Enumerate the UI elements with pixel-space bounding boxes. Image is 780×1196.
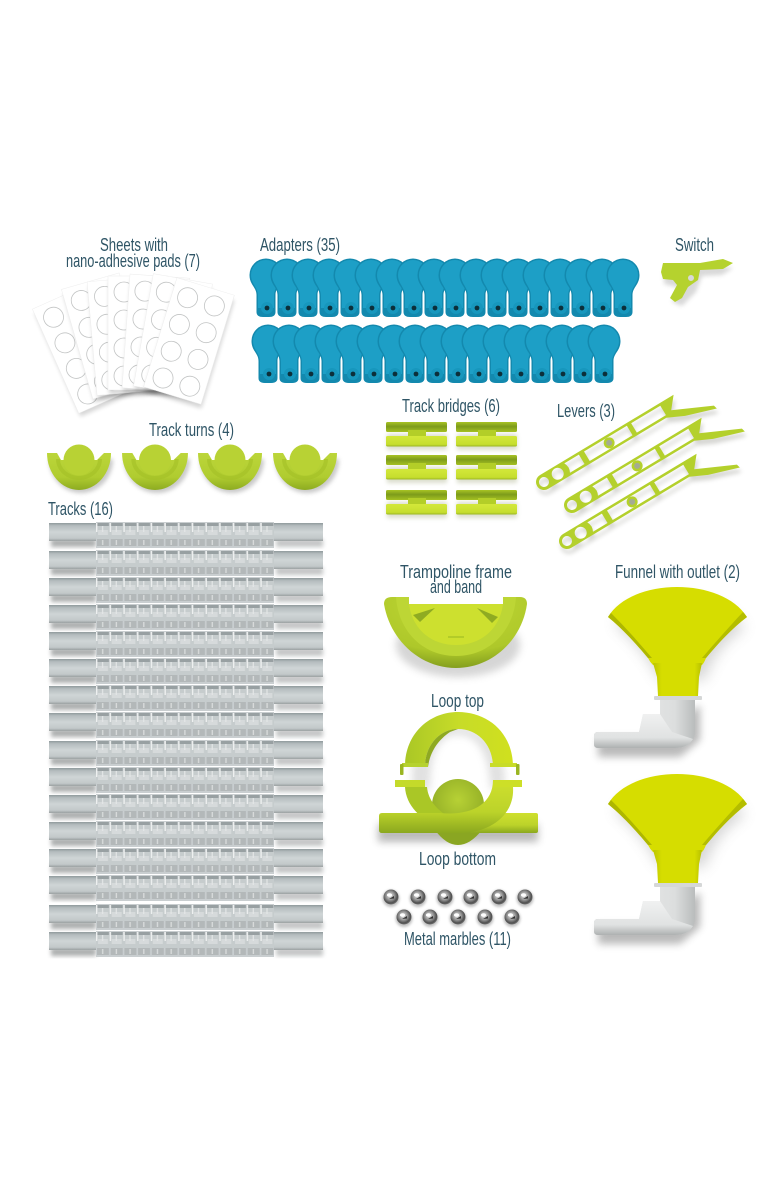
panel: tracks (48, 499, 323, 957)
fan of adhesive sheets (32, 273, 234, 417)
panel: marbles (382, 890, 534, 949)
panel: funnels (594, 562, 747, 944)
heading: funnel: Funnel with outlet (2) (615, 562, 740, 582)
heading: adapters: Adapters (35) (260, 235, 340, 255)
panel: loop (378, 691, 538, 869)
loop assembly (378, 712, 538, 845)
heading: loop bottom: Loop bottom (419, 849, 496, 869)
panel: switch (661, 235, 733, 306)
trampoline frame and band (384, 597, 527, 677)
panel: trampoline (384, 562, 527, 677)
heading: marbles: Metal marbles (11) (404, 929, 511, 949)
funnel 1 (594, 587, 747, 757)
adapters row 2 (252, 324, 620, 383)
panel: track bridges (386, 396, 517, 518)
heading: sheets: Sheets with (100, 235, 168, 255)
track turn pieces (47, 444, 339, 493)
stack of 16 tracks (49, 522, 323, 957)
panel: adapters (250, 235, 640, 383)
lever pieces (532, 379, 747, 572)
panel: track turns (47, 420, 339, 493)
heading: track turns: Track turns (4) (149, 420, 234, 440)
heading: loop top: Loop top (431, 691, 484, 711)
heading: track bridges: Track bridges (6) (402, 396, 500, 416)
panel: levers (532, 379, 747, 572)
icon: switch (661, 259, 733, 306)
heading: levers: Levers (3) (557, 401, 615, 421)
adapters row 1 (250, 258, 640, 317)
heading: sheets (66, 235, 200, 271)
heading: trampoline: Trampoline frame (400, 562, 512, 582)
heading: trampoline (400, 562, 512, 597)
heading: tracks: Tracks (16) (48, 499, 113, 519)
heading: switch: Switch (675, 235, 714, 255)
metal marbles (382, 890, 534, 927)
heading: trampoline: and band (430, 577, 482, 597)
bridge pieces (386, 422, 517, 518)
funnel 2 (594, 774, 747, 944)
panel: sheets with nano-adhesive pads (32, 235, 234, 417)
heading: sheets: nano-adhesive pads (7) (66, 251, 200, 271)
